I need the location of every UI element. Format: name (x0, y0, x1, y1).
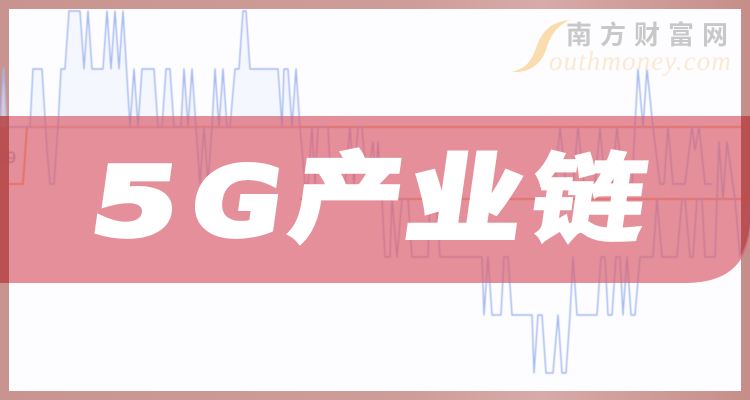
title glyph G: G (185, 148, 290, 258)
blue line lower right (640, 142, 750, 257)
watermark logo (512, 20, 736, 76)
blue line lower dip (482, 257, 640, 373)
logo domain: outhmoney.com (549, 46, 732, 76)
blue line middle (300, 127, 482, 257)
blue line upper left (0, 11, 300, 184)
logo swoosh S (512, 20, 570, 72)
orange baseline series (0, 127, 750, 184)
red title band (0, 116, 750, 283)
title glyph 5: 5 (85, 147, 186, 258)
band overlay on left frame (0, 116, 9, 283)
title (85, 145, 653, 258)
orange lower baseline (300, 198, 750, 200)
logo Chinese name: 南方财富网 (566, 20, 736, 50)
title glyph ye: 业 (401, 148, 530, 254)
blue line upper right (545, 69, 712, 184)
band overlay on right frame (741, 116, 750, 255)
title glyph lian: 链 (524, 147, 653, 254)
title glyph chan: 产 (285, 145, 410, 252)
